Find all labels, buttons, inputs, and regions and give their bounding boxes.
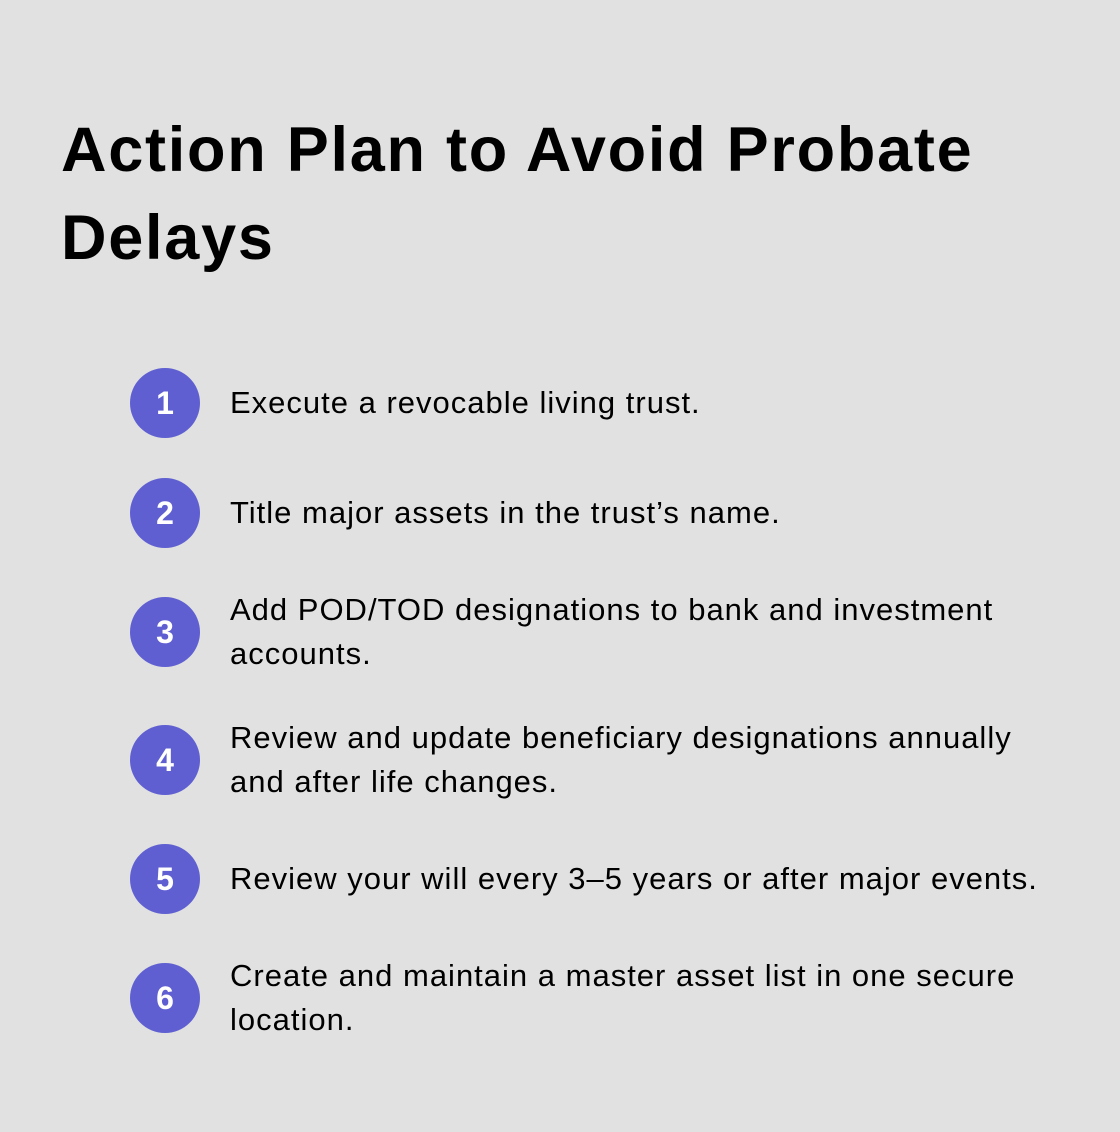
step 4: 4 [156, 742, 174, 778]
step 4: Review and update beneficiary designations annually and after life changes. [230, 720, 1012, 799]
step 2: Title major assets in the trust’s name. [230, 495, 781, 530]
step 6: Create and maintain a master asset list in one secure location. [230, 958, 1015, 1037]
step 5: Review your will every 3–5 years or after major events. [230, 861, 1038, 896]
step 2: 2 [156, 495, 174, 531]
step 3: 3 [156, 614, 174, 650]
step 6: 6 [156, 980, 174, 1016]
title: Action Plan to Avoid Probate Delays [61, 115, 973, 273]
step 1 [130, 368, 701, 438]
step 5 [130, 844, 1038, 914]
step 2 [130, 478, 781, 548]
step 1: 1 [156, 385, 174, 421]
step 1: Execute a revocable living trust. [230, 385, 701, 420]
step 3: Add POD/TOD designations to bank and investment accounts. [230, 592, 993, 671]
step 5: 5 [156, 861, 174, 897]
